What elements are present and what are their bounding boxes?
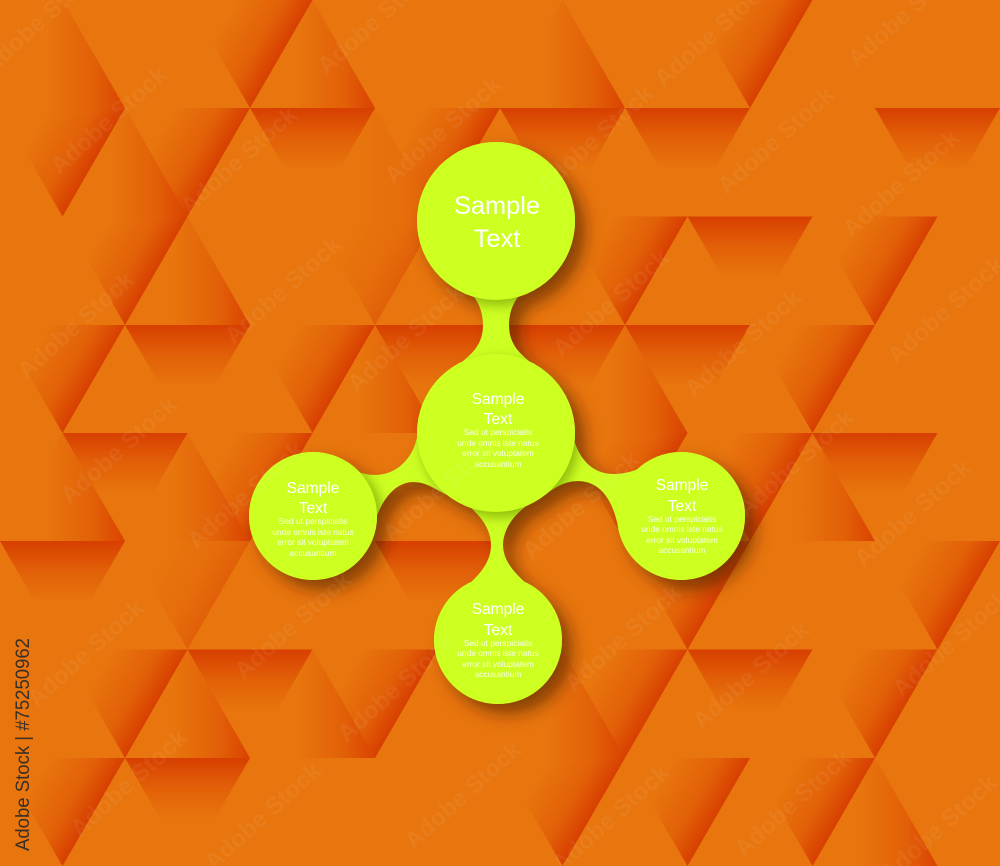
watermark pattern: Adobe Stock — [332, 629, 460, 748]
watermark pattern: Adobe Stock — [12, 266, 140, 385]
circle: left: Sed ut perspiciatis — [279, 516, 347, 526]
watermark pattern: Adobe Stock — [55, 391, 183, 510]
circle: centre: Sed ut perspiciatis — [464, 427, 532, 437]
watermark pattern: Adobe Stock — [559, 579, 687, 698]
connector inner shadows — [360, 296, 583, 524]
circle: left — [249, 452, 377, 580]
watermark pattern: Adobe Stock — [531, 80, 659, 199]
metaball diagram: circles and connectors — [249, 142, 745, 704]
watermark pattern: Adobe Stock — [849, 454, 977, 573]
watermark pattern: Adobe Stock — [175, 101, 303, 220]
circle: bottom: accusantium — [474, 669, 522, 679]
circle: bottom: unde omnis iste natus — [457, 648, 539, 658]
circle: bottom — [434, 576, 562, 704]
circle: bottom: Text — [484, 622, 513, 639]
circle: left: Sample — [287, 480, 339, 497]
watermark pattern: Adobe Stock — [712, 81, 840, 200]
watermark pattern: Adobe Stock — [517, 446, 645, 565]
watermark pattern: Adobe Stock — [45, 61, 173, 180]
circle: right: Text — [668, 498, 697, 515]
blob silhouette with drop shadow — [249, 142, 745, 704]
circle: right: unde omnis iste natus — [641, 524, 723, 534]
watermark pattern: Adobe Stock — [377, 429, 505, 548]
circle: centre: Sample — [472, 391, 524, 408]
watermark pattern: Adobe Stock — [679, 284, 807, 403]
watermark pattern: Adobe Stock — [687, 616, 815, 735]
circle: right: Sed ut perspiciatis — [648, 514, 716, 524]
circle: top: Text — [474, 225, 520, 253]
watermark pattern: Adobe Stock — [732, 404, 860, 523]
circle: centre: Text — [484, 411, 513, 428]
watermark pattern: Adobe Stock — [219, 231, 347, 350]
circle: right: Sample — [656, 477, 708, 494]
watermark pattern: Adobe Stock — [547, 244, 675, 363]
circle: top — [417, 142, 575, 300]
watermark pattern: Adobe Stock — [22, 594, 150, 713]
circle: centre: unde omnis iste natus — [457, 438, 539, 448]
circle: right: error sit voluptatem — [646, 535, 718, 545]
watermark pattern: Adobe Stock — [729, 744, 857, 863]
watermark pattern: Adobe Stock — [837, 124, 965, 243]
circle: left: Text — [299, 500, 328, 517]
stock id caption: Adobe Stock | #75250962 — [13, 638, 34, 851]
watermark pattern: Adobe Stock — [182, 436, 310, 555]
watermark pattern: Adobe Stock — [342, 279, 470, 398]
circle: left: unde omnis iste natus — [272, 527, 354, 537]
watermark pattern: Adobe Stock — [229, 566, 357, 685]
circle: right: accusantium — [658, 545, 706, 555]
circle: centre — [417, 354, 575, 512]
circle: bottom: error sit voluptatem — [462, 659, 534, 669]
watermark pattern: Adobe Stock — [379, 71, 507, 190]
circle: top: Sample — [454, 192, 540, 220]
circle: centre: error sit voluptatem — [462, 448, 534, 458]
watermark pattern: Adobe Stock — [65, 724, 193, 843]
circle: centre: accusantium — [474, 459, 522, 469]
circle: left: error sit voluptatem — [277, 537, 349, 547]
watermark pattern: Adobe Stock — [399, 736, 527, 855]
circle: left: accusantium — [289, 548, 337, 558]
circle: bottom: Sample — [472, 601, 524, 618]
circle: right — [617, 452, 745, 580]
circle: bottom: Sed ut perspiciatis — [464, 638, 532, 648]
